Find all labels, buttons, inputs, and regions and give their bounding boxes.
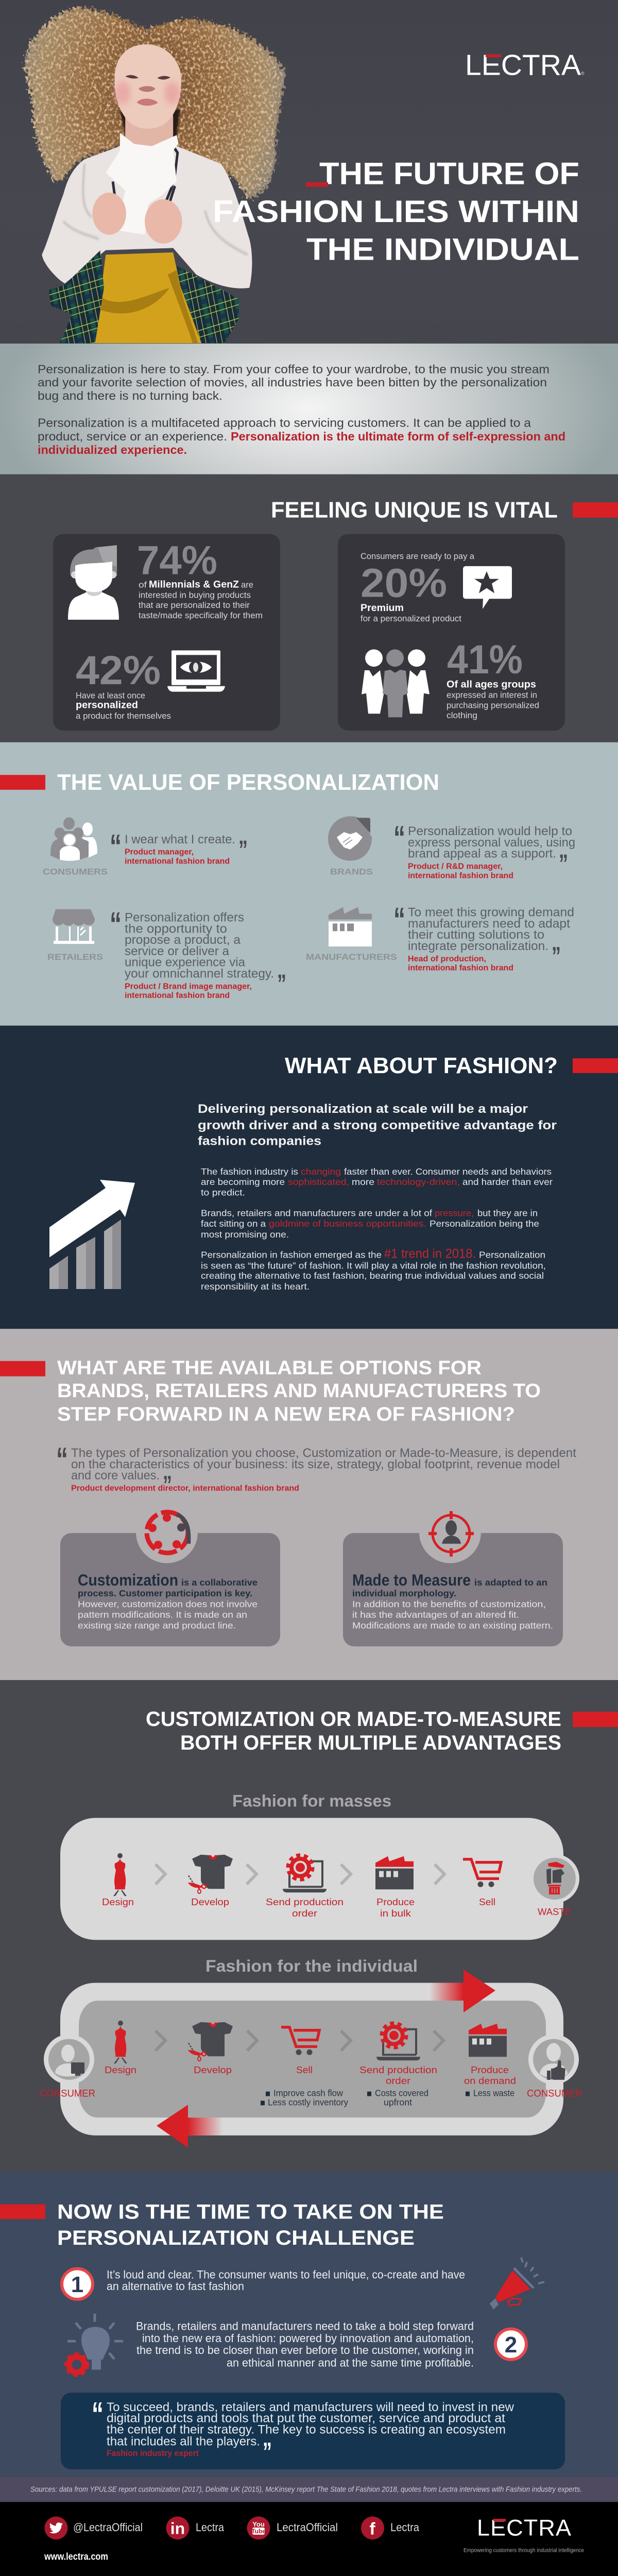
section: hero: [0, 0, 618, 344]
quote: “: [110, 828, 122, 866]
step: waste: WASTE: [538, 1907, 571, 1918]
logo: Lectra: ®: [581, 71, 585, 76]
social: youtube: Tube: [251, 2528, 266, 2535]
text: millennials: taste/made specifically for them: [139, 611, 263, 620]
heading: THE VALUE OF PERSONALIZATION: [57, 770, 439, 795]
text: made to measure: [352, 1571, 553, 1631]
text: millennials: that are personalized to their: [139, 600, 250, 610]
social: linkedin: [166, 2517, 225, 2539]
callout: expert quote: [61, 2393, 565, 2469]
text: changing: faster than ever. Consumer needs and behaviors: [344, 1166, 552, 1177]
text: millennials: interested in buying products: [139, 590, 251, 600]
stat: 42%: 42%: [76, 647, 161, 693]
label: CONSUMERS: [43, 867, 108, 876]
stat: 20%: 20%: [360, 560, 447, 605]
heading: [0, 1358, 541, 1426]
quote: their cutting solutions to: [408, 928, 544, 942]
icon: young person: [68, 545, 119, 620]
step: design: Design: [102, 1897, 134, 1908]
step: sell: [261, 2027, 348, 2107]
callout: expert quote: the center of their strategy. The key to success is creating an ecosystem: [107, 2423, 506, 2437]
text: bold step: into the new era of fashion: powered by innovation and automation,: [142, 2332, 474, 2345]
title: THE INDIVIDUAL: [306, 232, 579, 266]
step: sell: Less costly inventory: [268, 2097, 348, 2107]
icon: megaphone: [490, 2258, 544, 2310]
quote: [110, 906, 286, 1000]
step: send production order: Send production: [359, 2065, 437, 2076]
quote: international fashion brand: [125, 857, 230, 866]
quote: on the characteristics of your business: its size, strategy, global footprint, revenue model: [71, 1458, 560, 1471]
title: FASHION LIES WITHIN: [213, 194, 579, 229]
title: [213, 156, 579, 266]
text: premium: for a personalized product: [360, 614, 461, 623]
section: footer: [0, 2502, 618, 2576]
subheading: fashion companies: [198, 1134, 321, 1148]
subheading: [198, 1102, 557, 1148]
section: feeling unique is vital: [0, 474, 618, 743]
text: customization: However, customization does not involve: [78, 1599, 258, 1609]
text: number one trend: [201, 1247, 546, 1292]
quote: ”: [559, 849, 568, 877]
section: intro text: bug and there is no turning back.: [38, 389, 222, 402]
quote: “: [56, 1441, 68, 1479]
text: changing: technology-driven,: [377, 1177, 460, 1187]
text: pressure: [201, 1208, 539, 1240]
text: changing: and harder than ever: [462, 1177, 553, 1187]
quote: “: [393, 819, 405, 857]
badge: number 2: 2: [505, 2332, 517, 2358]
subheading: fashion for masses: Fashion for masses: [232, 1791, 391, 1810]
text: all age groups: Of all ages groups: [447, 679, 536, 690]
panel: customization: [60, 1502, 280, 1647]
text: made to measure: Made to Measure: [352, 1571, 471, 1589]
text: personalized: [76, 691, 171, 721]
text: millennials: of: [139, 580, 147, 589]
section: intro text: product, service or an experience.: [38, 430, 227, 443]
quote: international fashion brand: [408, 871, 513, 880]
quote: your omnichannel strategy.: [125, 967, 274, 981]
text: pressure: goldmine of business opportunities.: [269, 1218, 426, 1229]
social: facebook: f: [369, 2519, 375, 2539]
badge: number 1: [62, 2268, 93, 2299]
quote: ”: [552, 941, 561, 970]
quote: “: [393, 901, 405, 938]
social: twitter: [44, 2517, 143, 2539]
icon: growth arrow and bars: [49, 1180, 135, 1289]
section: intro text: [0, 344, 618, 475]
text: customization: [78, 1571, 258, 1631]
step: produce on demand: [464, 2024, 516, 2098]
text: customization: pattern modifications. It is made on an: [78, 1609, 247, 1620]
quote: [393, 901, 574, 973]
step: develop: Develop: [194, 2065, 232, 2076]
step: send production order: [266, 1855, 344, 1919]
text: changing: to predict.: [201, 1188, 245, 1198]
consumer: left: [40, 2035, 95, 2099]
section: sources: [0, 2477, 618, 2502]
section: intro text: Personalization is here to stay. From your coffee to your wardrobe, to the music you stream: [38, 362, 550, 376]
text: loud and clear: an alternative to fast fashion: [107, 2280, 244, 2293]
panel: left stats: [53, 534, 280, 731]
quote: and core values.: [71, 1469, 160, 1483]
label: MANUFACTURERS: [306, 952, 397, 962]
step: develop: [188, 2022, 233, 2076]
text: made to measure: individual morphology.: [352, 1588, 456, 1598]
heading: WHAT ARE THE AVAILABLE OPTIONS FOR: [57, 1358, 482, 1379]
text: number one trend: Personalization in fashion emerged as the: [201, 1250, 382, 1260]
stat: 41%: 41%: [447, 636, 523, 682]
consumer: right: CONSUMER: [527, 2088, 582, 2099]
stat: 74%: 74%: [137, 537, 217, 583]
step: produce on demand: Less waste: [473, 2088, 514, 2098]
quote: ”: [277, 969, 286, 997]
icon: three people: [362, 649, 430, 717]
text: all age groups: expressed an interest in: [447, 690, 537, 700]
quote: integrate personalization.: [408, 939, 548, 953]
step: design: [102, 1853, 134, 1908]
heading: BRANDS, RETAILERS AND MANUFACTURERS TO: [57, 1380, 541, 1402]
quote: Product development director, international fashion brand: [71, 1484, 299, 1493]
link: website: www.lectra.com: [44, 2551, 108, 2562]
text: pressure: Brands, retailers and manufacturers are under a lot of: [201, 1208, 432, 1218]
heading: BOTH OFFER MULTIPLE ADVANTAGES: [180, 1732, 561, 1754]
quote: Product / Brand image manager,: [125, 982, 252, 991]
heading: STEP FORWARD IN A NEW ERA OF FASHION?: [57, 1404, 515, 1426]
text: changing: sophisticated,: [288, 1177, 349, 1187]
social: twitter: @LectraOfficial: [73, 2521, 143, 2534]
text: bold step: [136, 2319, 474, 2369]
social: linkedin: in: [170, 2519, 185, 2538]
text: all age groups: clothing: [447, 710, 477, 720]
consumer: left: CONSUMER: [40, 2088, 95, 2099]
text: customization: existing size range and product line.: [78, 1620, 236, 1631]
badge: number 2: [495, 2329, 526, 2360]
step: develop: Develop: [191, 1897, 229, 1908]
callout: expert quote: digital products and tools that put the customer, service and product at: [107, 2412, 505, 2426]
section: intro text: individualized experience.: [38, 443, 187, 456]
icon: crowd: [50, 817, 97, 861]
section: intro text: Personalization is a multifaceted approach to servicing customers. It can be applied to a: [38, 416, 531, 429]
step: send production order: Costs covered: [375, 2088, 428, 2098]
text: all age groups: purchasing personalized: [447, 700, 539, 710]
icon: target on person: [428, 1511, 474, 1556]
quote: To meet this growing demand: [408, 906, 574, 920]
text: all age groups: [447, 679, 539, 720]
text: number one trend: Personalization: [479, 1250, 545, 1260]
text: number one trend: is seen as “the future” of fashion. It will play a vital role in the fashion revolution,: [201, 1260, 546, 1270]
section: intro text: Personalization is the ultimate form of self-expression and: [231, 430, 565, 443]
text: pressure: Personalization being the: [430, 1218, 539, 1229]
text: personalized: Have at least once: [76, 691, 145, 701]
quote: Product manager,: [125, 848, 194, 857]
heading: [0, 2201, 444, 2249]
text: loud and clear: [107, 2268, 465, 2293]
step: produce in bulk: [375, 1856, 415, 1919]
quote: Personalization offers: [125, 911, 244, 925]
callout: expert quote: To succeed, brands, retailers and manufacturers will need to invest in new: [107, 2400, 514, 2414]
icon: laptop with eye: [167, 650, 225, 692]
quote: propose a product, a: [125, 933, 241, 947]
subheading: growth driver and a strong competitive advantage for: [198, 1118, 557, 1132]
icon: storefront: [53, 909, 95, 944]
text: number one trend: creating the alternative to fast fashion, bearing true individual values and social: [201, 1270, 544, 1281]
text: number one trend: responsibility at its heart.: [201, 1281, 310, 1292]
item: brands: [328, 816, 575, 880]
text: consumers ready: Consumers are ready to pay a: [360, 551, 475, 561]
callout: expert quote: that includes all the players.: [107, 2434, 260, 2448]
text: made to measure: it has the advantages of an altered fit.: [352, 1609, 519, 1620]
panel: made to measure: [343, 1502, 563, 1647]
heading: [146, 1708, 618, 1754]
icon: handshake: [328, 816, 372, 861]
icon: factory: [329, 907, 372, 946]
step: send production order: order: [386, 2076, 410, 2087]
text: made to measure: is adapted to an: [474, 1578, 547, 1588]
step: produce in bulk: Produce: [376, 1897, 415, 1908]
text: changing: [201, 1166, 553, 1198]
text: pressure: but they are in: [477, 1208, 538, 1218]
heading: CUSTOMIZATION OR MADE-TO-MEASURE: [146, 1708, 561, 1731]
quote: [393, 819, 575, 880]
quote: unique experience via: [125, 956, 246, 970]
step: design: [105, 2021, 136, 2076]
quote: manufacturers need to adapt: [408, 917, 570, 930]
text: millennials: Millennials & GenZ: [149, 579, 239, 590]
arrow: bottom loop: [157, 2105, 222, 2148]
quote: service or deliver a: [125, 944, 230, 958]
icon: light bulb with gear: [66, 2314, 123, 2375]
social: youtube: You: [252, 2520, 265, 2528]
quote: international fashion brand: [408, 964, 513, 973]
step: produce on demand: Produce: [471, 2065, 509, 2076]
text: pressure: pressure,: [435, 1208, 474, 1218]
badge: number 1: 1: [71, 2272, 83, 2297]
text: pressure: most promising one.: [201, 1229, 289, 1240]
panel: right stats: [338, 534, 565, 731]
subheading: Delivering personalization at scale will be a major: [198, 1102, 528, 1116]
section: what about fashion: [0, 1026, 618, 1329]
quote: international fashion brand: [125, 991, 230, 1000]
quote: ”: [163, 1470, 172, 1499]
text: customization: is a collaborative: [181, 1578, 258, 1588]
section: personalization challenge: [0, 2172, 618, 2477]
quote: [110, 828, 248, 866]
social: facebook: [361, 2517, 420, 2539]
callout: expert quote: ”: [263, 2437, 272, 2466]
step: produce in bulk: in bulk: [380, 1908, 411, 1919]
step: sell: Sell: [479, 1897, 495, 1908]
process: fashion for masses: [60, 1818, 579, 1940]
illustration: girl with curly hair: [24, 8, 285, 343]
step: sell: Improve cash flow: [273, 2088, 343, 2098]
social: youtube: LectraOfficial: [277, 2521, 338, 2534]
text: number one trend: #1 trend in 2018.: [384, 1247, 476, 1261]
text: loud and clear: It’s loud and clear. The consumer wants to feel unique, co-create and have: [107, 2268, 465, 2281]
text: millennials: [139, 579, 263, 620]
social: facebook: Lectra: [390, 2521, 420, 2534]
callout: expert quote: Fashion industry expert: [107, 2448, 199, 2458]
section: value of personalization: [0, 742, 618, 1026]
item: retailers: [47, 906, 286, 1000]
heading: PERSONALIZATION CHALLENGE: [57, 2227, 415, 2249]
arrow: top loop: [430, 1970, 495, 2012]
quote: brand appeal as a support.: [408, 847, 556, 861]
title: THE FUTURE OF: [319, 156, 579, 191]
quote: I wear what I create.: [125, 833, 235, 846]
text: bold step: the trend is to be closer than ever before to the customer, working in: [136, 2344, 474, 2357]
text: millennials: are: [241, 580, 253, 589]
step: sell: Sell: [296, 2065, 313, 2076]
step: send production order: [359, 2023, 437, 2107]
process: fashion for the individual: [40, 1970, 582, 2148]
quote: The types of Personalization you choose, Customization or Made-to-Measure, is dependent: [71, 1446, 576, 1460]
text: changing: more: [352, 1177, 374, 1187]
item: manufacturers: [306, 901, 574, 973]
section: available options: [0, 1329, 618, 1680]
tagline: Empowering customers through industrial intelligence: [464, 2547, 584, 2553]
quote: Personalization would help to: [408, 824, 572, 838]
text: bold step: an ethical manner and at the same time profitable.: [227, 2357, 474, 2369]
text: customization: process. Customer participation is key.: [78, 1588, 252, 1598]
text: premium: [360, 602, 461, 623]
text: premium: Premium: [360, 602, 404, 614]
step: send production order: Send production: [266, 1897, 344, 1908]
text: changing: are becoming more: [201, 1177, 285, 1187]
subheading: fashion for the individual: Fashion for the individual: [205, 1956, 418, 1975]
logo: Lectra: LECTRA: [465, 49, 581, 82]
step: produce on demand: on demand: [464, 2076, 516, 2087]
quote: “: [110, 906, 122, 943]
step: waste: [534, 1858, 576, 1918]
label: BRANDS: [330, 867, 373, 876]
step: send production order: order: [292, 1908, 317, 1919]
text: personalized: personalized: [76, 699, 138, 710]
quote: the opportunity to: [125, 922, 227, 936]
section: multiple advantages: [0, 1680, 618, 2172]
step: sell: [463, 1859, 501, 1908]
step: send production order: upfront: [384, 2097, 412, 2107]
text: personalized: a product for themselves: [76, 711, 171, 721]
logo: Lectra footer: LECTRA: [477, 2515, 571, 2541]
text: customization: Customization: [78, 1571, 178, 1589]
label: RETAILERS: [47, 952, 103, 962]
text: changing: changing: [301, 1166, 341, 1177]
text: bold step: Brands, retailers and manufacturers need to take a bold step forward: [136, 2319, 474, 2332]
quote: [56, 1441, 576, 1499]
icon: star speech bubble: [463, 566, 512, 609]
step: develop: [188, 1855, 233, 1908]
quote: express personal values, using: [408, 836, 575, 850]
text: pressure: fact sitting on a: [201, 1218, 266, 1229]
heading: NOW IS THE TIME TO TAKE ON THE: [57, 2201, 444, 2223]
quote: Head of production,: [408, 955, 486, 963]
heading: FEELING UNIQUE IS VITAL: [271, 498, 558, 523]
step: design: Design: [105, 2065, 136, 2076]
social: linkedin: Lectra: [196, 2521, 225, 2534]
icon: collaboration circle: [147, 1512, 188, 1553]
section: intro text: and your favorite selection of movies, all industries have been bitten by the personalization: [38, 376, 547, 389]
social: youtube: [247, 2517, 338, 2539]
consumer: right: [527, 2035, 582, 2099]
quote: Product / R&D manager,: [408, 862, 503, 871]
callout: expert quote: “: [92, 2396, 104, 2433]
item: consumers: [43, 817, 248, 876]
text: made to measure: Modifications are made to an existing pattern.: [352, 1620, 553, 1631]
heading: WHAT ABOUT FASHION?: [285, 1053, 558, 1078]
quote: ”: [238, 835, 248, 864]
text: made to measure: In addition to the benefits of customization,: [352, 1599, 546, 1609]
text: changing: The fashion industry is: [201, 1166, 298, 1177]
